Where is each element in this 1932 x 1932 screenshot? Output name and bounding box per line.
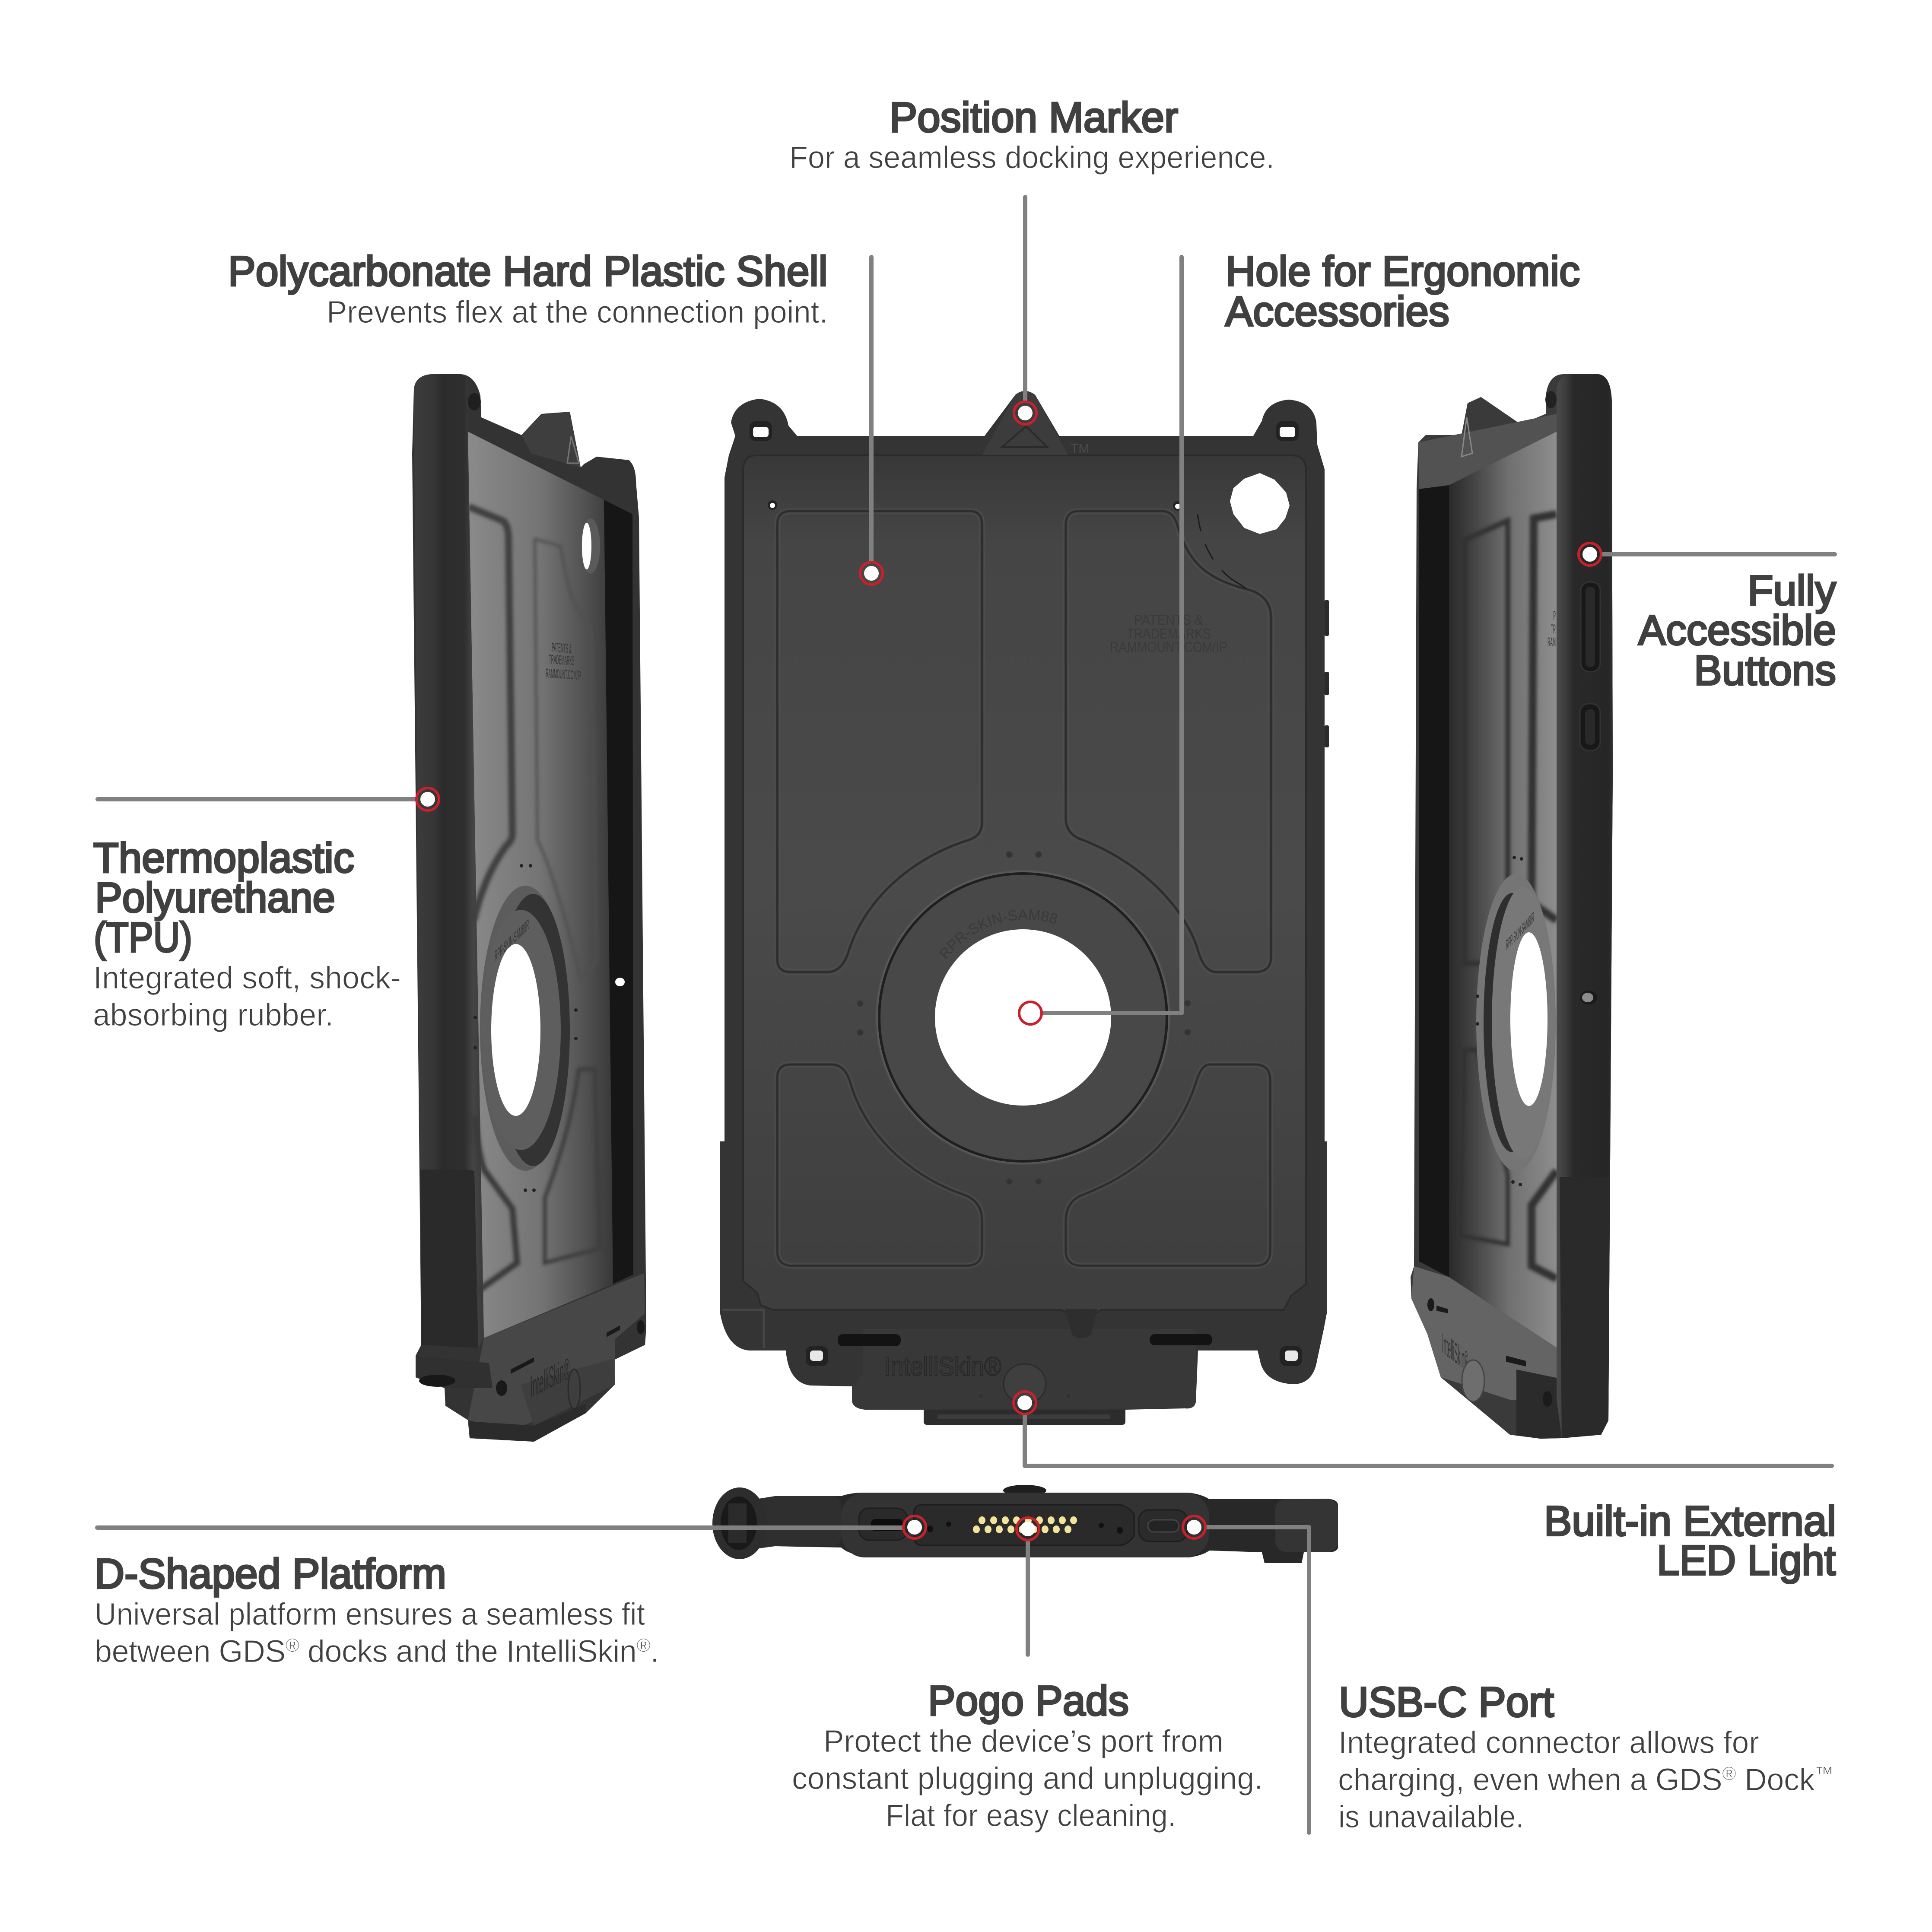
device: bottom edge view <box>712 1485 1338 1563</box>
bottom view ear neck <box>756 1496 782 1549</box>
heading: Position Marker <box>890 94 1178 141</box>
right device top rim <box>1418 414 1557 489</box>
marker: position marker <box>1014 402 1036 424</box>
left device connector tab <box>470 1404 586 1442</box>
right device centre hole <box>1510 932 1548 1106</box>
description line 3: is unavailable. <box>1338 1800 1524 1834</box>
left device camera hole <box>581 518 600 574</box>
bottom view top button <box>1003 1485 1046 1496</box>
marker: pogo pads <box>1017 1518 1039 1540</box>
bottom view pogo pads <box>973 1516 1077 1533</box>
centre device model text: RPR-SKIN-SAM88R <box>0 0 1059 962</box>
description line 3: Flat for easy cleaning. <box>886 1799 1176 1833</box>
centre device ear holes <box>750 421 1302 1366</box>
right device slots <box>1427 1298 1552 1407</box>
centre device LED button <box>1004 1364 1046 1404</box>
heading line 2: LED Light <box>1657 1537 1836 1584</box>
centre device patents text: TRADEMARKS <box>1127 626 1211 642</box>
line: accessible buttons <box>1602 552 1835 556</box>
heading line 1: Hole for Ergonomic <box>1226 248 1580 295</box>
bottom view left port <box>859 1508 907 1540</box>
marker: ergonomic hole <box>1019 1002 1042 1024</box>
right device interior floor <box>1449 432 1558 1349</box>
text block: Hole for Ergonomic Accessories <box>1225 248 1580 335</box>
bottom view left ear <box>712 1487 767 1559</box>
description line 1: Integrated soft, shock- <box>93 961 401 995</box>
description line 2: ™ <box>1814 1763 1833 1784</box>
right device lower bumper <box>1516 1370 1562 1439</box>
bottom view USB-C port <box>1139 1510 1187 1541</box>
right device side oval <box>1580 991 1597 1004</box>
centre device corner bumper <box>722 1310 764 1348</box>
left device button <box>568 1369 580 1409</box>
right device lower spine <box>1560 1177 1609 1438</box>
left device floor channels <box>469 507 600 1291</box>
description: Prevents flex at the connection point. <box>327 295 828 330</box>
line: LED light <box>1025 1415 1832 1466</box>
description line 2: between GDS <box>95 1634 286 1669</box>
left device silhouette <box>412 374 646 1442</box>
left device spine <box>414 374 484 1348</box>
text block: Pogo Pads <box>792 1677 1263 1833</box>
bottom view connector block <box>841 1493 1209 1557</box>
left device ear hole <box>468 393 481 410</box>
left device bottom lip <box>468 1273 645 1430</box>
centre device recess floor <box>743 455 1306 1322</box>
line: polycarbonate shell <box>869 257 874 561</box>
marker: accessible buttons <box>1579 543 1601 566</box>
description line 2: . <box>650 1634 659 1669</box>
right device bottom lip <box>1411 1266 1558 1400</box>
device: left angled view <box>412 374 646 1442</box>
line: pogo pads <box>1026 1541 1030 1655</box>
left device dimples <box>473 864 578 1192</box>
description line 2: Dock <box>1736 1763 1815 1797</box>
line: USB-C port <box>1206 1527 1309 1833</box>
centre device small holes <box>768 500 1182 511</box>
marker: USB-C port <box>1183 1516 1205 1538</box>
heading line 1: Thermoplastic <box>93 834 354 881</box>
right device dimples <box>1476 856 1523 1186</box>
right device patents text: P <box>1553 608 1556 623</box>
heading: D-Shaped Platform <box>95 1550 446 1597</box>
description line 2: ® <box>636 1635 650 1656</box>
left device ring disc <box>480 886 571 1171</box>
right device patents text <box>1548 608 1556 649</box>
right device silhouette <box>1411 374 1613 1439</box>
right device power button <box>1580 704 1600 750</box>
centre device panel recesses <box>777 511 1271 1266</box>
bottom view right bump <box>1275 1499 1338 1552</box>
centre device patents text: RAMMOUNT.COM/IP <box>1110 639 1227 655</box>
device: right angled view <box>1411 374 1613 1439</box>
line: ergonomic hole <box>1042 257 1182 1013</box>
heading: Pogo Pads <box>928 1677 1129 1724</box>
centre device ring <box>878 872 1168 1163</box>
centre device platform slots <box>838 1334 1212 1346</box>
bottom view plate dots <box>927 1522 1123 1534</box>
heading line 3: (TPU) <box>94 914 192 961</box>
description line 2: constant plugging and unplugging. <box>792 1761 1263 1796</box>
right device ring disc <box>1476 874 1556 1171</box>
callout markers <box>416 402 1601 1540</box>
centre device side buttons <box>1325 600 1329 747</box>
text block: Thermoplastic Polyurethane <box>93 834 401 1033</box>
line: D-shaped platform <box>97 1525 902 1530</box>
right device floor channels <box>1460 514 1557 1279</box>
centre device notch <box>1065 1309 1097 1338</box>
heading: USB-C Port <box>1339 1678 1554 1725</box>
centre device silhouette <box>720 391 1327 1425</box>
description line 2: ® <box>286 1635 299 1656</box>
marker: thermoplastic polyurethane <box>416 788 439 810</box>
heading line 2: Accessible <box>1638 607 1836 654</box>
text block: Polycarbonate Hard Plastic Shell <box>228 248 828 330</box>
description line 1: Protect the device’s port from <box>823 1724 1223 1759</box>
left device patents text: RAMMOUNT.COM/IP <box>546 666 581 683</box>
heading: Polycarbonate Hard Plastic Shell <box>228 248 828 295</box>
right device button <box>1462 1360 1484 1401</box>
description line 2: docks and the IntelliSkin <box>299 1634 636 1669</box>
left device side hole <box>615 978 625 986</box>
heading line 1: Fully <box>1748 567 1836 614</box>
left device centre hole <box>491 944 540 1116</box>
marker: LED light <box>1014 1392 1036 1414</box>
device: centre back view <box>0 0 1329 1425</box>
centre device position triangle <box>982 391 1068 455</box>
right device brand text: IntelliSkin® <box>1442 1327 1468 1379</box>
description: For a seamless docking experience. <box>789 140 1274 175</box>
bottom view left wing <box>775 1496 841 1546</box>
left device slots and ear holes <box>496 1320 645 1396</box>
text block: Fully Accessible Buttons <box>1638 567 1836 694</box>
bottom view body <box>775 1493 1338 1563</box>
left device interior floor <box>468 432 613 1338</box>
left device lower spine <box>420 1169 478 1348</box>
text block: Built-in External LED Light <box>1544 1497 1836 1584</box>
left device patents text: TRADEMARKS <box>549 652 574 668</box>
left device brand text: IntelliSkin® <box>531 1351 569 1404</box>
marker: D-shaped platform <box>903 1516 926 1538</box>
line: thermoplastic polyurethane <box>98 797 416 801</box>
description line 1: Universal platform ensures a seamless fit <box>95 1597 645 1632</box>
description line 2: charging, even when a GDS <box>1338 1763 1722 1797</box>
centre device patents text: PATENTS & <box>1134 612 1203 628</box>
right device patents text: TR <box>1551 622 1556 636</box>
heading line 1: Built-in External <box>1544 1497 1836 1544</box>
line: position marker <box>1023 197 1027 401</box>
right device model text: RPR-SKIN-SAM88R <box>1506 909 1534 954</box>
right device spine <box>1557 374 1613 1438</box>
right device inner wall <box>1419 485 1449 1277</box>
left device patents text: PATENTS & <box>552 640 572 656</box>
heading line 3: Buttons <box>1694 647 1836 694</box>
centre device dimples <box>857 852 1191 1399</box>
left device inner wall <box>604 500 633 1284</box>
left device foot band <box>416 1356 493 1388</box>
left device platform <box>521 1359 615 1426</box>
heading line 2: Polyurethane <box>95 874 335 921</box>
centre device camera hole <box>1198 473 1290 593</box>
centre device trademark glyph: TM <box>1071 442 1089 456</box>
centre device connector tab <box>924 1410 1125 1425</box>
marker: polycarbonate shell <box>860 562 883 585</box>
description line 1: Integrated connector allows for <box>1338 1725 1759 1760</box>
left device top mound <box>521 412 581 467</box>
left device model text: RPR-SKIN-SAM88R <box>495 916 529 965</box>
centre device D-platform <box>852 1329 1196 1410</box>
text block: D-Shaped Platform <box>95 1550 659 1669</box>
text block: USB-C Port <box>1338 1678 1833 1834</box>
left device patents text <box>546 640 581 683</box>
centre device hole <box>935 929 1111 1106</box>
heading line 2: Accessories <box>1225 288 1449 335</box>
right device patents text: RAM <box>1548 635 1556 649</box>
centre device patents text <box>1110 612 1227 655</box>
description line 2: ® <box>1722 1763 1736 1784</box>
right device ear hole <box>1545 391 1557 408</box>
description line 2: absorbing rubber. <box>93 998 334 1033</box>
leader lines <box>97 197 1835 1833</box>
right device marker triangle <box>1462 417 1472 457</box>
text block: Position Marker <box>789 94 1274 175</box>
bottom view pogo plate <box>914 1505 1134 1545</box>
right device volume button <box>1581 582 1600 672</box>
centre device brand text: IntelliSkin® <box>884 1352 1001 1382</box>
